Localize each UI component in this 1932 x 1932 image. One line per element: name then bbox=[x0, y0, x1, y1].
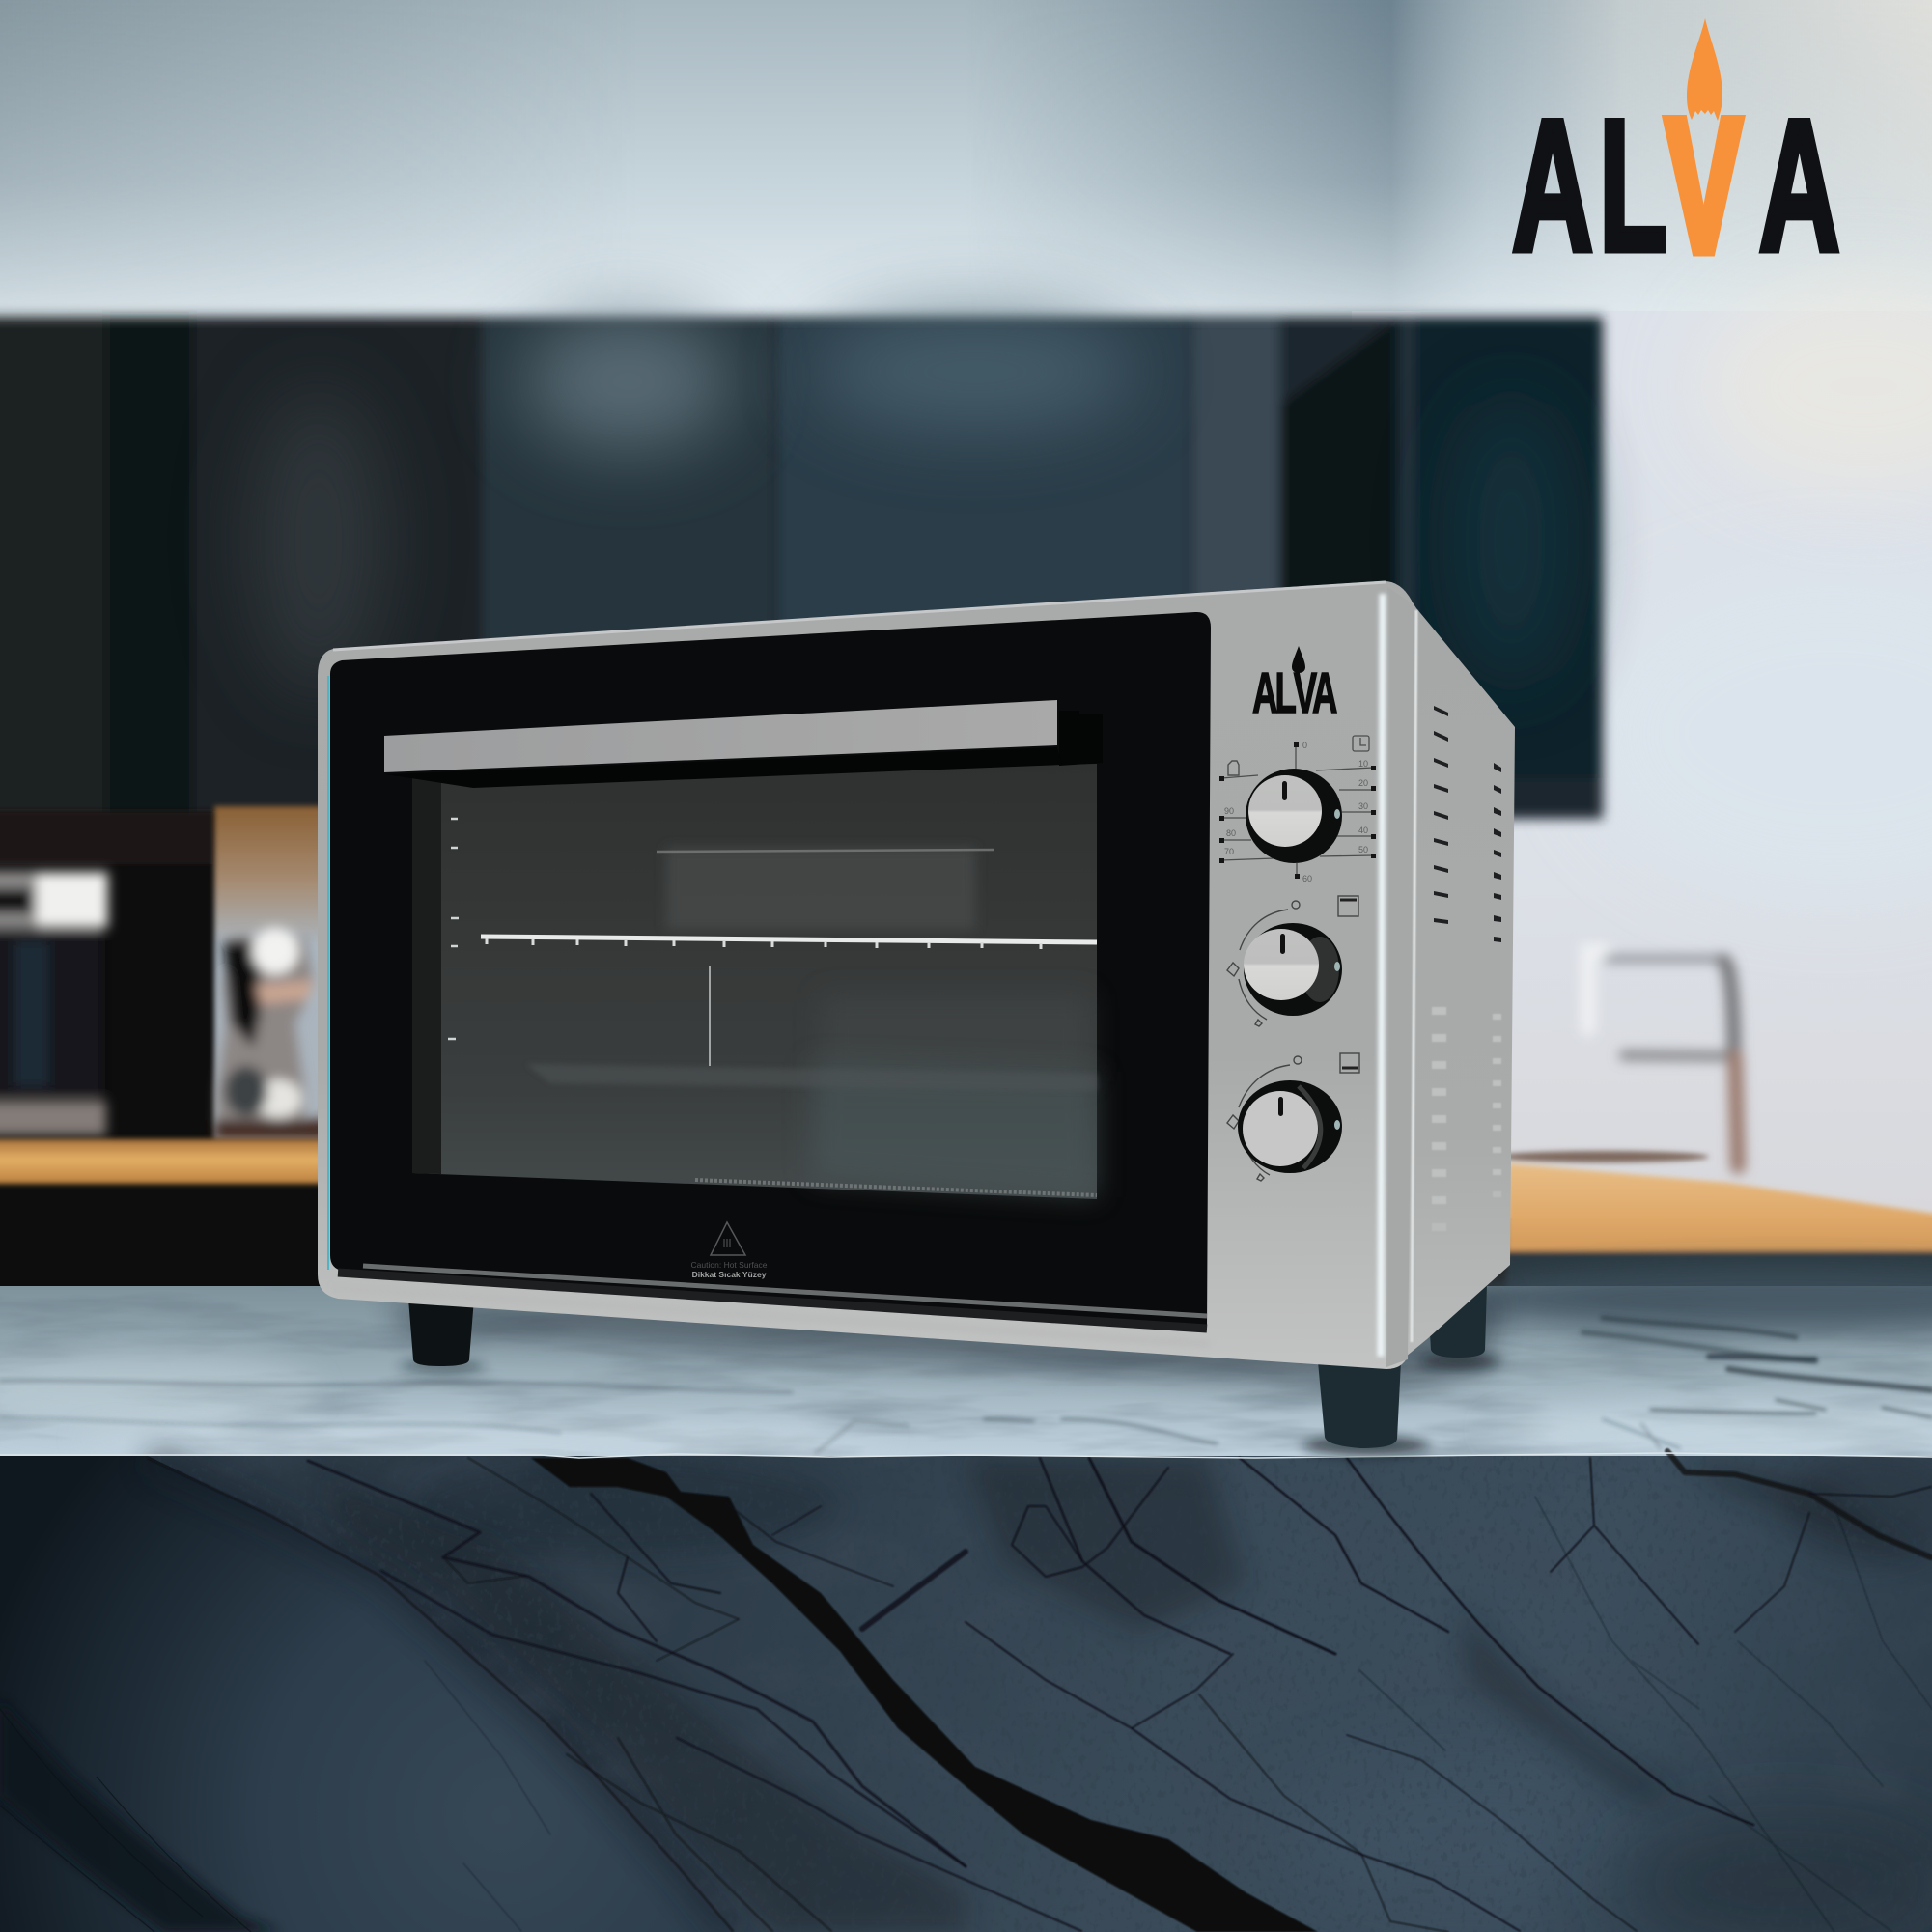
right wall bbox=[1352, 311, 1932, 1218]
timer scale: 20 bbox=[1358, 778, 1368, 788]
timer scale: 50 bbox=[1358, 845, 1368, 854]
oven front logo: A bbox=[1252, 662, 1277, 725]
oven front logo: L bbox=[1275, 662, 1297, 725]
blurred faucet bbox=[1588, 951, 1738, 1166]
marble mottling bbox=[335, 1456, 1932, 1932]
timer scale: 80 bbox=[1226, 828, 1236, 838]
timer scale bbox=[1219, 741, 1376, 883]
slab front edge bbox=[0, 1453, 1932, 1458]
top edge highlight bbox=[333, 582, 1386, 650]
bottom-left vein lines bbox=[0, 1709, 251, 1932]
dark speckle zones bbox=[319, 1458, 1932, 1932]
hot surface warning: Dikkat Sıcak Yüzey bbox=[692, 1270, 767, 1279]
left edge highlight bbox=[327, 676, 329, 1270]
timer scale: 40 bbox=[1358, 826, 1368, 835]
icon: manual hand bbox=[1228, 761, 1239, 775]
timer scale: 90 bbox=[1224, 806, 1234, 816]
knob 1 bbox=[1246, 769, 1342, 863]
kitchen background bbox=[0, 0, 1932, 1294]
marble counter top bbox=[0, 1266, 1932, 1457]
window interior bbox=[448, 819, 1097, 1197]
knob 3 arcs and icons bbox=[1227, 1053, 1359, 1181]
logo wordmark: V bbox=[1666, 80, 1741, 290]
main black fissure bbox=[531, 1458, 1318, 1932]
blurred blender bbox=[214, 928, 330, 1139]
side vents lower bbox=[1432, 1007, 1501, 1231]
timer scale: 10 bbox=[1358, 759, 1368, 769]
oven window bbox=[412, 764, 1097, 1199]
marble veins bbox=[0, 1318, 1932, 1453]
timer scale: 0 bbox=[1302, 741, 1307, 750]
timer scale: 70 bbox=[1224, 847, 1234, 856]
brand logo bbox=[1512, 18, 1840, 290]
bottom-left dark vein band bbox=[0, 1699, 280, 1932]
blurred coffee machine bbox=[0, 871, 108, 1135]
oven front panel bbox=[318, 581, 1416, 1369]
oven feet bbox=[408, 1284, 1487, 1448]
timer scale: 60 bbox=[1302, 874, 1312, 883]
door lower strip bbox=[338, 1266, 1207, 1329]
soft boundary shade bbox=[148, 1458, 733, 1932]
oven rack bbox=[481, 937, 1097, 942]
oven front logo: V bbox=[1294, 662, 1317, 725]
hot surface warning bbox=[691, 1222, 768, 1279]
timer scale: 30 bbox=[1358, 801, 1368, 811]
hot surface warning: Caution: Hot Surface bbox=[691, 1260, 768, 1270]
left wood counter bbox=[0, 1139, 330, 1184]
knob 2 bbox=[1244, 923, 1342, 1016]
logo wordmark: A bbox=[1512, 80, 1593, 290]
wall cabinets bbox=[0, 317, 1603, 823]
window bottom rail bbox=[695, 1180, 1097, 1195]
contact shadow bbox=[386, 1294, 1506, 1390]
right wood counter bbox=[1497, 1151, 1932, 1290]
dark marble front panel bbox=[0, 1448, 1932, 1932]
cracked marble field bbox=[148, 1456, 1932, 1932]
marble cracks bbox=[148, 1451, 1932, 1932]
logo wordmark: L bbox=[1599, 80, 1667, 290]
upper wall bbox=[0, 0, 1932, 328]
oven door bbox=[330, 612, 1211, 1330]
corner bevel bbox=[1386, 587, 1416, 1367]
knob 3 bbox=[1238, 1080, 1342, 1173]
oven bbox=[318, 581, 1515, 1455]
oven front logo bbox=[1252, 646, 1337, 725]
lower trim highlight bbox=[333, 1288, 1210, 1344]
icon: timer bbox=[1353, 736, 1369, 751]
oven side panel bbox=[1390, 591, 1515, 1369]
backsplash bbox=[214, 806, 330, 1139]
left tall unit bbox=[0, 811, 328, 1294]
knob 2 arcs and icons bbox=[1227, 896, 1358, 1026]
side vents upper bbox=[1434, 706, 1501, 942]
door handle bbox=[384, 700, 1057, 772]
oven front logo: A bbox=[1312, 662, 1337, 725]
logo flame bbox=[1687, 18, 1722, 121]
logo wordmark: A bbox=[1759, 80, 1840, 290]
